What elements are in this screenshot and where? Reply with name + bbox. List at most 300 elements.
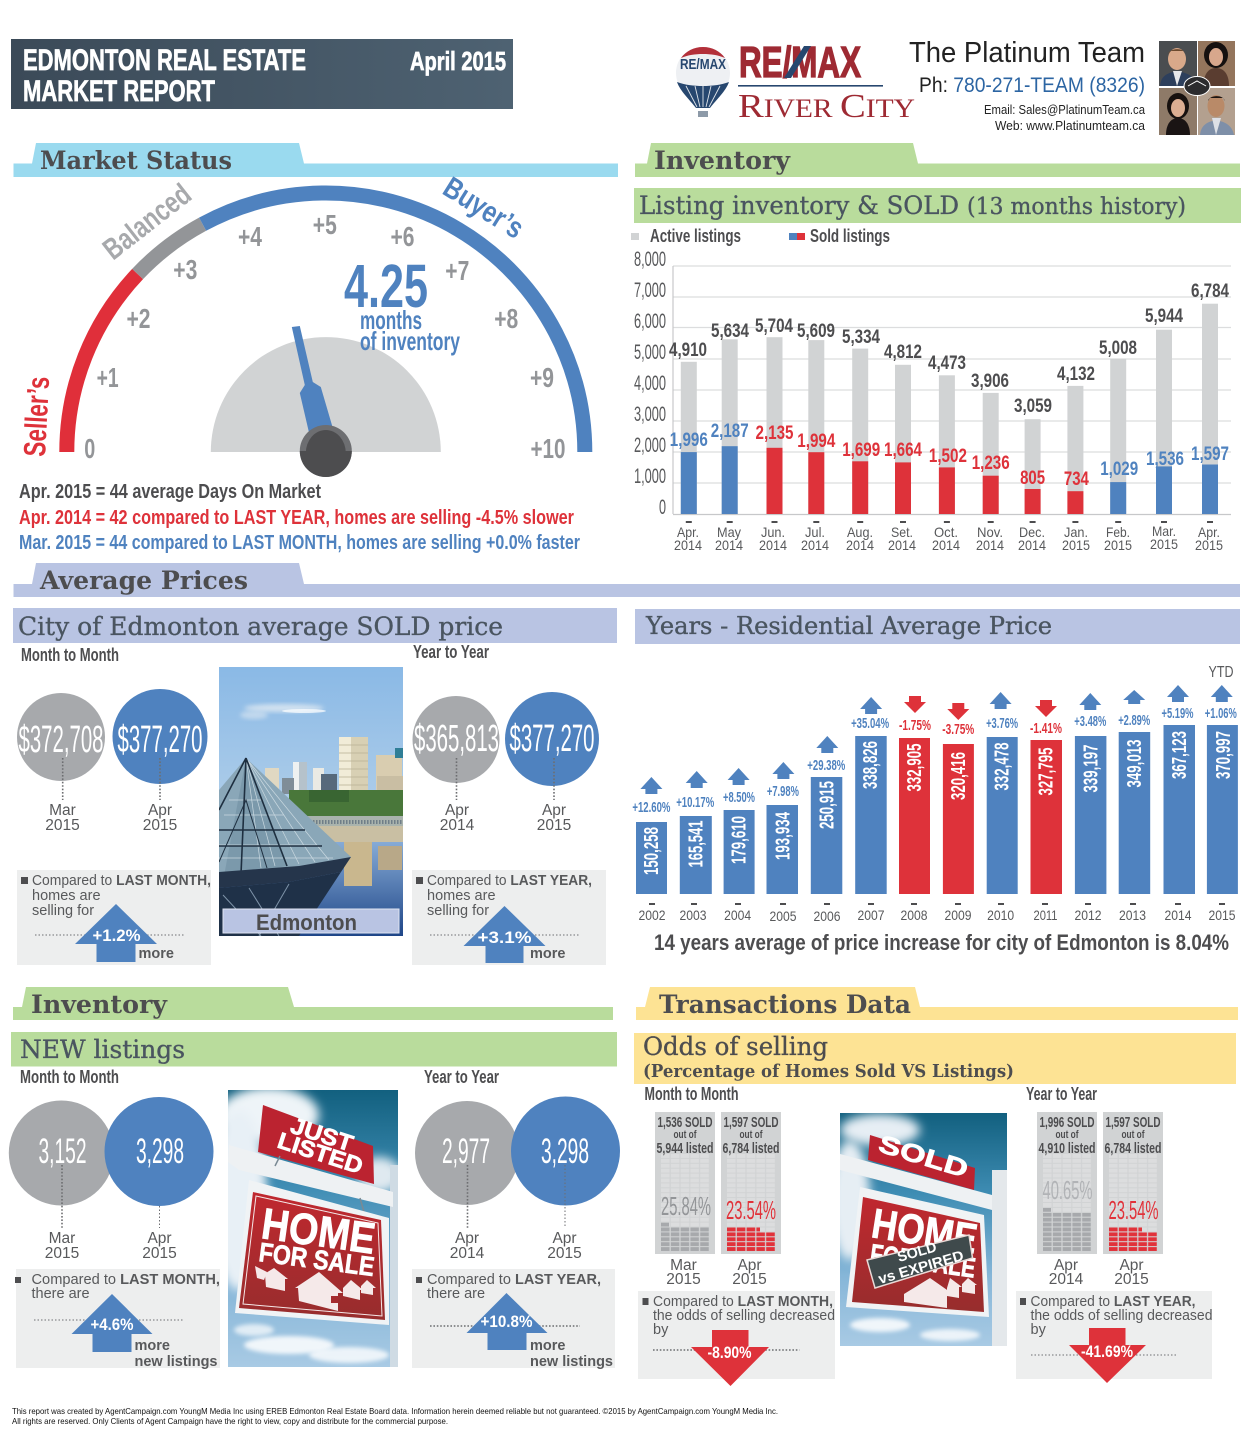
card: April 2015 odds: out of (740, 1129, 763, 1141)
chart legend: Sold listings (810, 226, 890, 246)
x axis month labels (674, 523, 1223, 553)
home for sale sign (846, 1187, 989, 1317)
y axis labels: 2,000 (634, 434, 666, 457)
subheading: listing inventory and sold: Listing inventory & SOLD (639, 191, 959, 220)
gauge scale numbers: +9 (530, 362, 554, 393)
card: April 2015 odds (721, 1112, 781, 1254)
bar chart: residential average price by year: YTD (1208, 664, 1234, 681)
gauge dial (211, 337, 441, 452)
sold value labels: 1,536 (1146, 449, 1184, 470)
y axis labels (634, 248, 666, 519)
period labels: Apr (148, 802, 172, 819)
sold value labels: 1,029 (1100, 459, 1138, 480)
bar value labels: 327,795 (1036, 748, 1058, 796)
y axis labels: 6,000 (634, 310, 666, 333)
heading: inventory (635, 143, 1240, 177)
card: March 2015 odds: 5,944 listed (656, 1140, 714, 1157)
card: March 2015 odds (655, 1112, 715, 1254)
callout: last month listings (15, 1269, 220, 1370)
subheading: new listings: NEW listings (20, 1035, 185, 1064)
bar chart: residential average price by year (632, 664, 1238, 924)
x axis month labels: 2014 (1018, 537, 1046, 553)
card: April 2015 odds: 1,597 SOLD (724, 1114, 779, 1131)
percent change labels: +29.38% (807, 758, 845, 774)
circle: April 2015 listings: 3,298 (136, 1132, 184, 1171)
sold vs expired banner: vs EXPIRED (877, 1248, 966, 1288)
circle: April 2015 listings (104, 1097, 214, 1206)
circle: April 2014 listings: 2,977 (442, 1132, 490, 1171)
callout: odds last month: Compared to LAST MONTH, (653, 1294, 833, 1310)
circle: April 2015 price: $377,270 (510, 718, 594, 760)
footer disclaimer: All rights are reserved. Only Clients of Agent Campaign have the right to view, copy and distribute for the commercial purpose. (12, 1416, 448, 1426)
heading: inventory lower: Inventory (31, 990, 168, 1019)
panel: year to year price (412, 642, 606, 965)
x axis month labels: May (717, 524, 741, 540)
gauge scale numbers: +10 (530, 433, 566, 464)
sold vs expired banner: SOLD (896, 1239, 939, 1266)
callout: last month price: +1.2% (92, 927, 141, 945)
callout: odds last month (638, 1291, 835, 1386)
callout: last year listings (412, 1269, 615, 1370)
callout: odds last month: -8.90% (708, 1344, 752, 1362)
period labels: Apr (1119, 1257, 1144, 1274)
period labels: Apr (552, 1230, 577, 1247)
sold value labels: 734 (1064, 469, 1089, 490)
circle: April 2015 listings: 3,298 (541, 1132, 589, 1171)
heading: inventory: Inventory (654, 146, 791, 175)
circle: March 2015 price (17, 693, 105, 781)
chart legend (631, 226, 890, 246)
x axis month labels: 2015 (1150, 536, 1178, 552)
period labels: 2015 (142, 1245, 177, 1262)
callout: last year price: more (530, 946, 565, 962)
year labels: 2004 (724, 907, 751, 923)
period labels: 2014 (440, 817, 475, 834)
title banner (11, 39, 513, 109)
footer disclaimer (12, 1406, 778, 1426)
title banner: April 2015 (410, 46, 506, 76)
bar value labels: 165,541 (686, 820, 708, 868)
year labels: 2013 (1119, 907, 1146, 923)
panel: new listings month to month (9, 1067, 220, 1370)
year labels: 2008 (900, 907, 928, 923)
title banner: EDMONTON REAL ESTATE (23, 44, 306, 77)
heading: market status (14, 143, 618, 177)
panel: month to month price: Month to Month (21, 645, 119, 665)
gauge scale numbers: +7 (445, 255, 469, 286)
sold value labels: 805 (1020, 468, 1045, 489)
circle: April 2015 price: $377,270 (118, 719, 202, 761)
gauge market labels (17, 171, 529, 457)
bar value labels: 367,123 (1169, 731, 1191, 779)
callout: last year listings: new listings (530, 1354, 613, 1370)
period labels (45, 1230, 177, 1262)
subheading: years residential average price (635, 609, 1240, 644)
callout: odds last year (1016, 1291, 1212, 1383)
card: March 2015 odds: out of (674, 1129, 697, 1141)
heading: transactions data: Transactions Data (659, 990, 911, 1019)
callout: odds last year: -41.69% (1081, 1343, 1133, 1361)
sold value labels: 2,135 (756, 423, 794, 444)
y axis labels: 8,000 (634, 248, 666, 271)
home for sale sign: FOR SALE (868, 1238, 977, 1284)
x axis month labels: 2014 (846, 537, 874, 553)
x axis month labels: Jul. (805, 524, 825, 540)
x axis month labels: 2014 (801, 537, 829, 553)
gauge value: 4.25 (344, 252, 428, 320)
percent change labels: +5.19% (1162, 706, 1194, 722)
RE/MAX River City logo: RE/MAX (739, 38, 861, 87)
callout: odds last year: by (1030, 1322, 1047, 1338)
heading: inventory lower (13, 987, 613, 1020)
heading: average prices: Average Prices (39, 566, 248, 595)
photo: Edmonton skyline (219, 667, 403, 936)
period labels: 2015 (666, 1271, 701, 1288)
callout: odds last month: by (653, 1322, 669, 1338)
active value labels: 5,609 (797, 321, 835, 342)
period labels: Apr (542, 802, 566, 819)
period labels: 2015 (732, 1271, 767, 1288)
gauge scale numbers: 0 (84, 433, 95, 464)
callout: last month price: Compared to LAST MONTH, (32, 873, 211, 889)
chart legend: Active listings (650, 226, 741, 246)
sold value labels: 1,502 (929, 446, 967, 467)
panel: odds year to year: Year to Year (1026, 1084, 1097, 1104)
sold value labels (670, 421, 1229, 490)
sold value labels: 1,994 (797, 431, 836, 452)
sold value labels: 1,996 (670, 430, 708, 451)
percent change labels (632, 706, 1237, 816)
y axis labels: 7,000 (634, 279, 666, 302)
gauge scale numbers: +2 (126, 303, 150, 334)
subheading: odds of selling: Odds of selling (643, 1032, 828, 1061)
period labels: Mar (49, 802, 76, 819)
panel: new listings year to year (412, 1067, 620, 1370)
panel: odds year to year (1016, 1084, 1212, 1383)
home for sale sign: HOME (869, 1199, 981, 1262)
x axis month labels: Oct. (934, 524, 958, 540)
callout: last month price: more (138, 946, 174, 962)
active value labels (669, 281, 1229, 417)
subheading: years residential average price: Years - Residential Average Price (645, 612, 1052, 640)
subheading: odds of selling (634, 1032, 1236, 1084)
just listed plate: JUST (287, 1112, 356, 1157)
percent change labels: +3.48% (1074, 714, 1106, 730)
change arrows (640, 685, 1233, 794)
bar value labels: 332,478 (992, 742, 1014, 790)
bar value labels: 370,997 (1213, 731, 1235, 779)
photo: just listed home for sale sign (228, 1090, 398, 1367)
just listed plate: LISTED (274, 1127, 366, 1179)
card: April 2014 odds: out of (1056, 1129, 1079, 1141)
x axis month labels: Dec. (1019, 524, 1045, 540)
team contact details (909, 37, 1145, 133)
gauge needle (292, 326, 352, 477)
x axis month labels: Aug. (847, 524, 873, 540)
gauge value: months (360, 305, 422, 335)
circle: March 2015 listings (9, 1100, 114, 1206)
RE/MAX River City logo: RE/MAX (680, 56, 726, 73)
year labels: 2009 (944, 907, 972, 923)
card: April 2015 odds: out of (1122, 1129, 1145, 1141)
title banner: MARKET REPORT (23, 75, 215, 108)
callout: last year price: homes are (427, 888, 496, 904)
days on market comparison text: Mar. 2015 = 44 compared to LAST MONTH, homes are selling +0.0% faster (19, 532, 580, 554)
active value labels: 5,008 (1099, 338, 1137, 359)
year labels: 2014 (1164, 907, 1192, 923)
gauge scale numbers (84, 209, 565, 464)
percent change labels: -1.75% (899, 718, 931, 734)
team contact details: The Platinum Team (909, 37, 1145, 69)
percent change labels: +8.50% (723, 790, 755, 806)
period labels (450, 1230, 582, 1262)
bar chart: active and sold listings (634, 248, 1231, 553)
sold value labels: 1,236 (972, 453, 1010, 474)
callout: last month listings: +4.6% (90, 1316, 134, 1334)
gauge market labels: Balanced (97, 178, 198, 267)
card: April 2015 odds: 1,597 SOLD (1106, 1114, 1161, 1131)
period labels: Apr (455, 1230, 479, 1247)
period labels: Mar (670, 1257, 697, 1274)
bar value labels: 179,610 (729, 816, 751, 864)
photo: sold vs expired sign (830, 1113, 1007, 1346)
x axis ticks (686, 521, 1213, 523)
x axis month labels: 2014 (715, 537, 743, 553)
period labels: 2014 (1049, 1271, 1084, 1288)
percent change labels: +10.17% (676, 795, 714, 811)
year labels: 2012 (1074, 907, 1102, 923)
card: April 2015 odds: 6,784 listed (1104, 1140, 1162, 1157)
x axis month labels: 2015 (1062, 537, 1090, 553)
circle: April 2015 price (505, 692, 599, 786)
x axis month labels: 2014 (674, 537, 702, 553)
x axis month labels: Nov. (977, 524, 1003, 540)
x axis month labels: 2014 (932, 537, 960, 553)
active listing bars (681, 304, 1218, 514)
sold plate (868, 1130, 975, 1190)
year labels: 2002 (638, 907, 666, 923)
period labels: Mar (49, 1230, 75, 1247)
callout: last month listings: there are (32, 1286, 90, 1302)
active value labels: 5,704 (755, 316, 793, 337)
sold value labels: 1,597 (1191, 444, 1229, 465)
RE/MAX River City logo (676, 38, 915, 125)
callout: odds last month: the odds of selling decreased (653, 1308, 835, 1324)
year labels: 2003 (680, 907, 707, 923)
x axis month labels: 2015 (1195, 537, 1223, 553)
gauge: months of inventory (17, 171, 585, 477)
card: April 2015 odds: 23.54% (1108, 1195, 1159, 1225)
gauge arc (67, 193, 585, 452)
sold value labels: 1,664 (884, 440, 922, 461)
sold value labels: 2,187 (711, 421, 749, 442)
heading: average prices (14, 563, 1240, 597)
sold value labels: 1,699 (842, 440, 880, 461)
callout: last year price: Compared to LAST YEAR, (427, 873, 592, 889)
circle: April 2014 price: $365,813 (414, 718, 499, 760)
RE/MAX River City logo: RIVER CITY (738, 88, 915, 125)
active value labels: 5,634 (711, 321, 749, 342)
circle: April 2014 listings (415, 1101, 519, 1205)
callout: last month listings: more (134, 1338, 170, 1354)
y axis labels: 3,000 (634, 403, 666, 426)
percent change labels: +7.98% (767, 784, 799, 800)
x axis month labels: 2014 (888, 537, 916, 553)
period labels: 2015 (547, 1245, 582, 1262)
panel: new listings year to year: Year to Year (424, 1067, 499, 1087)
y axis labels: 4,000 (634, 372, 666, 395)
gauge scale numbers: +8 (494, 303, 518, 334)
card: April 2015 odds: 23.54% (726, 1195, 776, 1225)
team contact details: Web: www.Platinumteam.ca (995, 119, 1145, 133)
y axis labels: 1,000 (634, 465, 666, 488)
home for sale sign (235, 1180, 389, 1325)
team contact details: Email: Sales@PlatinumTeam.ca (984, 103, 1145, 117)
year labels: 2011 (1034, 907, 1058, 923)
x axis month labels: Jan. (1064, 524, 1088, 540)
percent change labels: -3.75% (942, 722, 974, 738)
period labels: 2015 (45, 1245, 79, 1262)
active value labels: 4,812 (884, 342, 922, 363)
callout: last month price: selling for (32, 903, 94, 919)
card: March 2015 odds: 25.84% (661, 1191, 711, 1221)
period labels (45, 802, 177, 834)
gauge value (344, 252, 460, 356)
active value labels: 3,059 (1014, 396, 1052, 417)
circle: March 2015 listings: 3,152 (38, 1132, 86, 1171)
year labels: 2015 (1208, 907, 1236, 923)
year labels (638, 907, 1236, 924)
subheading: city of edmonton average sold price (13, 608, 617, 643)
panel: odds month to month (638, 1084, 835, 1386)
y axis labels: 5,000 (634, 341, 666, 364)
period labels: Apr (445, 802, 469, 819)
bar value labels: 339,197 (1080, 744, 1102, 792)
callout: last month listings: new listings (134, 1354, 218, 1370)
panel: month to month price (17, 645, 211, 965)
days on market comparison text: Apr. 2015 = 44 average Days On Market (19, 481, 321, 503)
subheading: listing inventory and sold: (13 months history) (967, 194, 1186, 220)
edmonton caption: Edmonton (256, 910, 357, 935)
bar value labels (641, 731, 1235, 875)
callout: last month price: homes are (32, 888, 101, 904)
circle: March 2015 price: $372,708 (18, 719, 104, 761)
gauge scale numbers: +1 (97, 362, 119, 393)
gauge scale numbers: +6 (390, 221, 414, 252)
year labels: 2007 (858, 907, 885, 923)
active value labels: 5,334 (842, 327, 880, 348)
team contact details: Ph: 780-271-TEAM (8326) (919, 74, 1145, 97)
callout: last year price: +3.1% (478, 929, 532, 947)
callout: last year price: selling for (427, 903, 489, 919)
team portrait photos (1159, 41, 1235, 135)
x axis month labels: Feb. (1106, 524, 1130, 540)
period labels: 2014 (450, 1245, 485, 1262)
period labels: 2015 (143, 817, 177, 834)
x axis month labels: Apr. (677, 524, 699, 540)
x axis month labels: Jun. (761, 524, 785, 540)
x axis month labels: 2014 (759, 537, 787, 553)
active value labels: 4,473 (928, 353, 966, 374)
gauge market labels: Seller’s (17, 376, 56, 457)
sold plate: SOLD (875, 1130, 971, 1184)
gauge scale numbers: +3 (173, 254, 197, 285)
panel: new listings month to month: Month to Month (20, 1067, 119, 1087)
active value labels: 4,910 (669, 340, 707, 361)
x axis month labels: Set. (891, 524, 913, 540)
percent change labels: +3.76% (986, 716, 1018, 732)
period labels: 2015 (45, 817, 80, 834)
card: April 2014 odds: 1,996 SOLD (1040, 1114, 1095, 1131)
year labels: 2005 (770, 908, 797, 924)
bar value labels: 150,258 (641, 827, 663, 875)
period labels: 2015 (537, 817, 571, 834)
subheading: listing inventory and sold (634, 188, 1241, 223)
callout: odds last year: the odds of selling decreased (1030, 1308, 1212, 1324)
sold listing bars (681, 446, 1218, 514)
circle: April 2014 price (412, 696, 500, 783)
active value labels: 3,906 (971, 371, 1009, 392)
bar value labels: 320,416 (948, 752, 970, 800)
period labels (440, 802, 571, 834)
period labels: 2015 (1114, 1271, 1149, 1288)
bar value labels: 332,905 (904, 744, 926, 792)
period labels (666, 1257, 767, 1288)
x axis month labels: Apr. (1198, 524, 1220, 540)
active value labels: 4,132 (1057, 364, 1095, 385)
house icons (255, 1266, 376, 1311)
card: April 2015 odds: 6,784 listed (722, 1140, 780, 1157)
bar value labels: 193,934 (772, 811, 794, 860)
year labels: 2006 (814, 908, 841, 924)
period labels: Apr (737, 1257, 762, 1274)
card: April 2014 odds (1037, 1112, 1097, 1254)
home for sale sign: FOR SALE (257, 1237, 376, 1282)
days on market comparison text: Apr. 2014 = 42 compared to LAST YEAR, homes are selling -4.5% slower (19, 507, 574, 529)
period labels: Apr (147, 1230, 172, 1247)
active value labels: 6,784 (1191, 281, 1229, 302)
bar value labels: 250,915 (816, 781, 838, 829)
price bars (636, 725, 1238, 894)
panel: year to year price: Year to Year (413, 642, 489, 662)
period labels: Apr (1054, 1257, 1078, 1274)
callout: last month price (17, 870, 211, 965)
subheading: city of edmonton average sold price: City of Edmonton average SOLD price (18, 612, 503, 641)
edmonton caption (223, 909, 399, 935)
percent change labels: +2.89% (1118, 713, 1150, 729)
callout: last year listings: Compared to LAST YEAR, (427, 1272, 601, 1288)
just listed plate (258, 1105, 374, 1184)
card: March 2015 odds: 1,536 SOLD (658, 1114, 713, 1131)
callout: last year listings: there are (427, 1286, 485, 1302)
percent change labels: -1.41% (1030, 721, 1062, 737)
heading: market status: Market Status (40, 146, 232, 175)
gauge market labels: Buyer’s (437, 171, 529, 246)
callout: last month listings: Compared to LAST MONTH, (32, 1272, 220, 1288)
x axis month labels: 2014 (976, 537, 1004, 553)
percent change labels: +35.04% (851, 716, 889, 732)
period labels (1049, 1257, 1149, 1288)
callout: last year listings: +10.8% (480, 1313, 533, 1331)
card: April 2014 odds: 40.65% (1042, 1175, 1093, 1205)
home for sale sign: HOME (259, 1199, 378, 1264)
percent change labels: +12.60% (632, 800, 670, 816)
gauge scale numbers: +4 (238, 221, 262, 252)
subheading: new listings (11, 1032, 617, 1066)
subheading: odds of selling: (Percentage of Homes Sold VS Listings) (643, 1061, 1014, 1082)
card: April 2014 odds: 4,910 listed (1038, 1140, 1096, 1157)
bar value labels: 349,013 (1124, 740, 1146, 788)
